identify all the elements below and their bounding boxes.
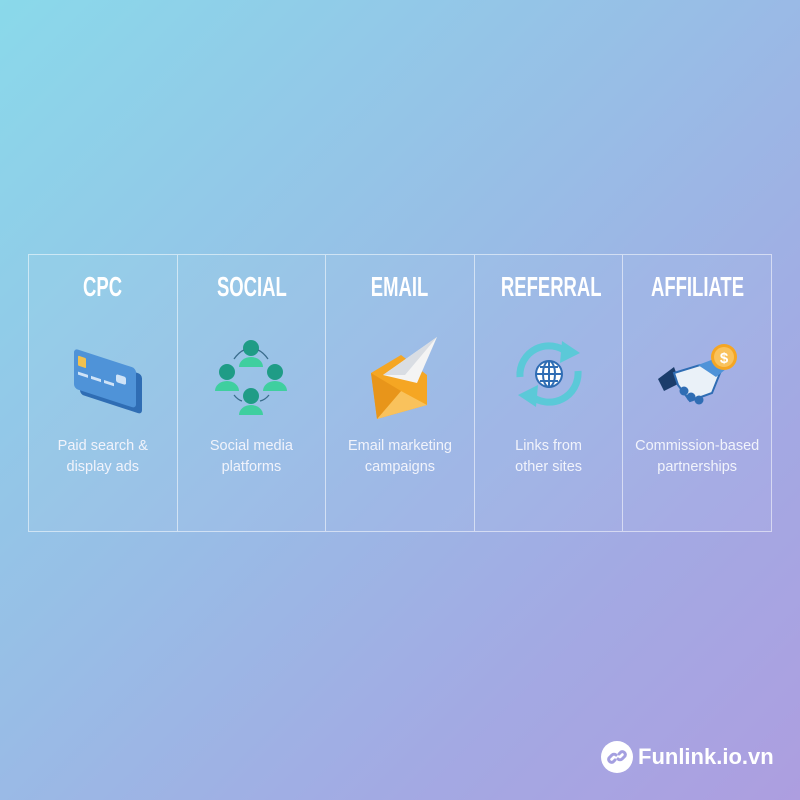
text: REFERRAL description: other sites — [515, 459, 582, 475]
text: CPC description: Paid search & — [58, 438, 148, 454]
text: CPC description: display ads — [67, 459, 139, 475]
text: EMAIL description: Email marketing — [348, 438, 452, 454]
icon: handshake with coin — [658, 344, 737, 404]
heading: CPC: CPC — [83, 271, 122, 302]
panel: AFFILIATE — [623, 255, 771, 531]
text: EMAIL description — [348, 438, 452, 475]
panel: REFERRAL — [475, 255, 623, 531]
panel: EMAIL — [326, 255, 475, 531]
text: SOCIAL description: Social media — [210, 438, 293, 454]
text: REFERRAL description — [515, 438, 582, 475]
text: REFERRAL description: Links from — [515, 438, 582, 454]
panel: channels grid — [28, 254, 772, 532]
panel: CPC — [29, 255, 178, 531]
text: AFFILIATE description — [635, 438, 759, 475]
icon: people network — [215, 340, 287, 415]
text: EMAIL description: campaigns — [365, 459, 435, 475]
logo: Funlink — [601, 741, 774, 773]
logo: Funlink: Funlink.io.vn — [638, 744, 774, 769]
text: AFFILIATE description: Commission-based — [635, 438, 759, 454]
heading: AFFILIATE: AFFILIATE — [651, 271, 744, 302]
icon: handshake with coin: $ — [720, 350, 729, 367]
icon: link — [601, 741, 633, 773]
heading: EMAIL: EMAIL — [371, 271, 429, 302]
panel: SOCIAL — [178, 255, 326, 531]
heading: SOCIAL: SOCIAL — [216, 271, 286, 302]
text: AFFILIATE description: partnerships — [657, 459, 737, 475]
text: CPC description — [58, 438, 148, 475]
icon: envelope with paper plane — [371, 337, 437, 419]
text: SOCIAL description — [210, 438, 293, 475]
heading: REFERRAL: REFERRAL — [501, 271, 601, 302]
icon: credit card — [74, 349, 142, 414]
text: SOCIAL description: platforms — [222, 459, 281, 475]
icon: globe with cycle arrows — [516, 341, 582, 407]
